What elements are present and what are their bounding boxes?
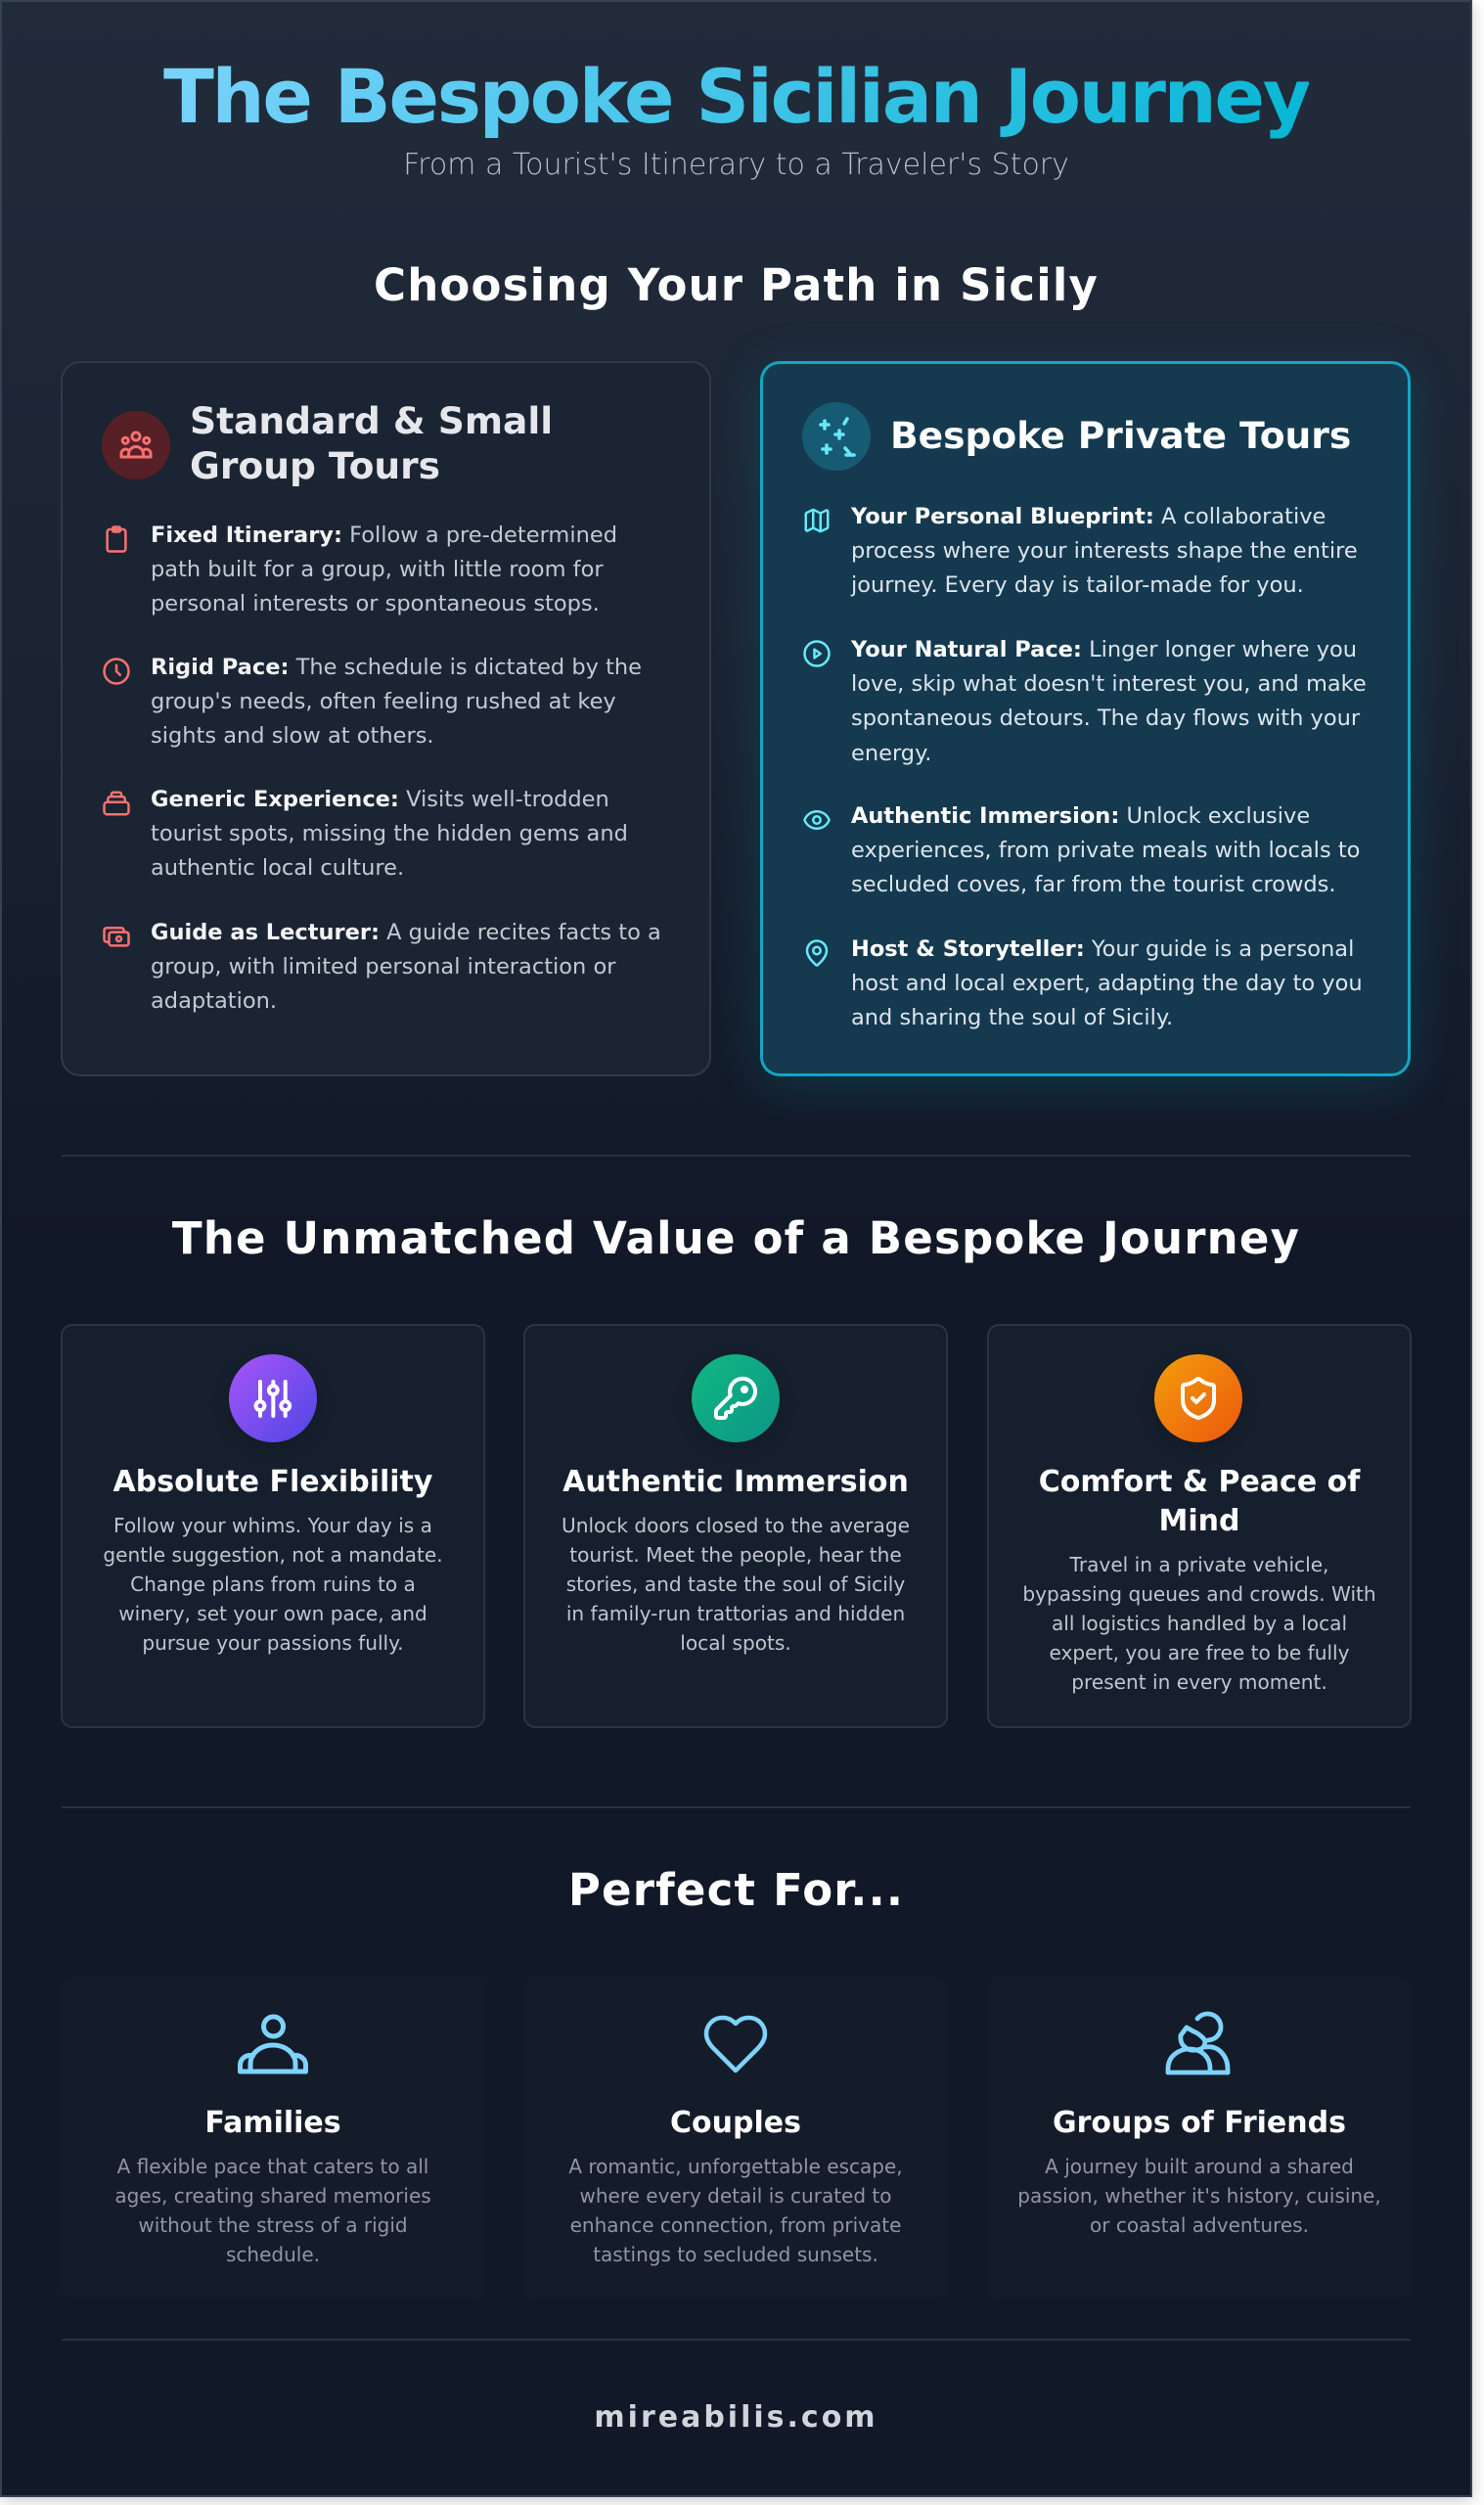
card text: Travel in a private vehicle,: [1070, 1553, 1328, 1576]
card text: Change plans from ruins to a: [130, 1572, 416, 1596]
icon: sliders: [229, 1354, 317, 1442]
card text: [114, 2155, 431, 2266]
card text: passion, whether it's history, cuisine,: [1017, 2184, 1381, 2208]
item: fixed itinerary: [106, 523, 617, 616]
item: rigid pace: Rigid Pace: The schedule is dictated by the: [151, 655, 642, 680]
item: personal blueprint: Your Personal Blueprint: A collaborative: [851, 504, 1326, 529]
panel: couples: [523, 1977, 948, 2299]
card text: stories, and taste the soul of Sicily: [566, 1572, 905, 1596]
panel: comfort and peace of mind: [987, 1324, 1412, 1728]
card text: bypassing queues and crowds. With: [1022, 1582, 1376, 1606]
card text: [568, 2155, 903, 2266]
item: host and storyteller: and sharing the soul of Sicily.: [851, 1005, 1173, 1030]
item: rigid pace: sights and slow at others.: [151, 723, 434, 749]
icon: family: [238, 2014, 308, 2074]
card text: in family-run trattorias and hidden: [566, 1602, 905, 1625]
icon: key: [692, 1354, 780, 1442]
card text: [1022, 1553, 1376, 1694]
card heading: Families: [204, 2106, 341, 2140]
item: natural pace: [803, 637, 1367, 766]
item: guide as lecturer: adaptation.: [151, 988, 277, 1014]
panel heading: [190, 399, 553, 487]
panel: absolute flexibility: [61, 1324, 485, 1728]
item: host and storyteller: Host & Storyteller: Your guide is a personal: [851, 936, 1354, 962]
card text: Unlock doors closed to the average: [562, 1514, 910, 1537]
card text: tourist. Meet the people, hear the: [569, 1543, 902, 1567]
item: generic experience: [103, 787, 628, 881]
card text: or coastal adventures.: [1090, 2213, 1309, 2237]
panel: standard and small group tours: [61, 361, 711, 1076]
card heading: [1039, 1465, 1361, 1538]
card text: present in every moment.: [1071, 1670, 1327, 1694]
panel: authentic immersion: [523, 1324, 948, 1728]
item: authentic immersion: secluded coves, far from the tourist crowds.: [851, 872, 1336, 897]
card heading: Couples: [670, 2106, 801, 2140]
item: natural pace: Your Natural Pace: Linger longer where you: [851, 637, 1357, 662]
item: personal blueprint: journey. Every day is tailor-made for you.: [851, 572, 1304, 598]
heading: perfect for: Perfect For...: [568, 1864, 904, 1916]
heading: choosing your path: Choosing Your Path in Sicily: [374, 259, 1099, 311]
card heading: Comfort & Peace of: [1039, 1465, 1360, 1499]
card heading: Groups of Friends: [1053, 2106, 1346, 2140]
item: rigid pace: [103, 655, 642, 749]
icon: sparkles: [802, 402, 871, 471]
card text: ages, creating shared memories: [114, 2184, 431, 2208]
item: generic experience: tourist spots, missing the hidden gems and: [151, 821, 628, 846]
card text: A flexible pace that caters to all: [117, 2155, 428, 2178]
card text: A romantic, unforgettable escape,: [568, 2155, 903, 2178]
card text: Follow your whims. Your day is a: [113, 1514, 432, 1537]
item: authentic immersion: Authentic Immersion: Unlock exclusive: [851, 803, 1310, 829]
item: personal blueprint: process where your interests shape the entire: [851, 538, 1358, 564]
card heading: Absolute Flexibility: [113, 1465, 432, 1499]
title: The Bespoke Sicilian Journey: [163, 53, 1309, 140]
card text: without the stress of a rigid: [138, 2213, 408, 2237]
icon: friends: [1166, 2012, 1231, 2074]
card text: enhance connection, from private: [570, 2213, 901, 2237]
card heading: Authentic Immersion: [562, 1465, 909, 1499]
card text: schedule.: [226, 2243, 320, 2266]
card text: expert, you are free to be fully: [1049, 1641, 1350, 1664]
item: natural pace: spontaneous detours. The day flows with your: [851, 706, 1360, 731]
card text: pursue your passions fully.: [142, 1631, 404, 1655]
card text: [1017, 2155, 1381, 2237]
item: guide as lecturer: Guide as Lecturer: A guide recites facts to a: [151, 920, 661, 945]
item: host and storyteller: [806, 936, 1363, 1030]
panel: families: [61, 1977, 485, 2299]
panel heading: Standard & Small: [190, 399, 553, 442]
card heading: Mind: [1159, 1504, 1239, 1538]
card text: [562, 1514, 910, 1655]
item: authentic immersion: experiences, from private meals with locals to: [851, 838, 1360, 863]
card text: winery, set your own pace, and: [118, 1602, 427, 1625]
item: authentic immersion: [803, 803, 1360, 897]
card text: A journey built around a shared: [1045, 2155, 1354, 2178]
item: guide as lecturer: group, with limited personal interaction or: [151, 954, 615, 979]
icon: shield check: [1154, 1354, 1242, 1442]
item: host and storyteller: host and local expert, adapting the day to you: [851, 971, 1363, 996]
card text: gentle suggestion, not a mandate.: [103, 1543, 443, 1567]
icon: group of people: [102, 411, 170, 479]
item: fixed itinerary: Fixed Itinerary: Follow a pre-determined: [151, 523, 617, 548]
panel heading: Bespoke Private Tours: [890, 414, 1351, 457]
card text: where every detail is curated to: [579, 2184, 891, 2208]
card text: tastings to secluded sunsets.: [593, 2243, 878, 2266]
item: generic experience: authentic local culture.: [151, 855, 404, 881]
card text: local spots.: [680, 1631, 791, 1655]
footer: website: mireabilis.com: [594, 2400, 878, 2435]
item: guide as lecturer: [103, 920, 661, 1014]
item: natural pace: energy.: [851, 741, 931, 766]
heading: unmatched value: The Unmatched Value of a Bespoke Journey: [172, 1212, 1300, 1264]
panel: bespoke private tours: [760, 361, 1411, 1076]
item: personal blueprint: [804, 504, 1358, 598]
panel: groups of friends: [987, 1977, 1412, 2299]
card text: all logistics handled by a local: [1052, 1612, 1347, 1635]
subtitle: From a Tourist's Itinerary to a Traveler's Story: [403, 148, 1069, 182]
item: generic experience: Generic Experience: Visits well-trodden: [151, 787, 609, 812]
icon: heart: [704, 2016, 767, 2072]
card text: [103, 1514, 443, 1655]
item: rigid pace: group's needs, often feeling rushed at key: [151, 689, 616, 714]
panel heading: Group Tours: [190, 444, 440, 487]
item: fixed itinerary: personal interests or spontaneous stops.: [151, 591, 600, 616]
item: natural pace: love, skip what doesn't interest you, and make: [851, 671, 1367, 697]
item: fixed itinerary: path built for a group, with little room for: [151, 557, 604, 582]
